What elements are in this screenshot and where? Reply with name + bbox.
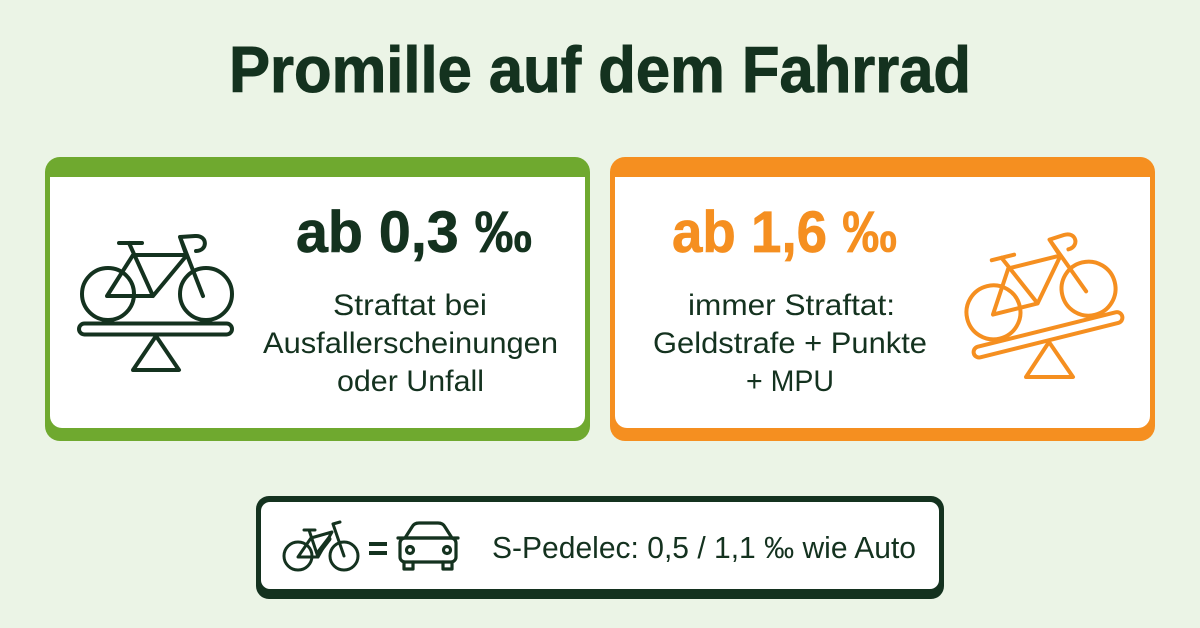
description (263, 289, 558, 398)
threshold heading: ab 0,3 ‰ (296, 200, 532, 265)
card body (615, 177, 1150, 428)
panel: S-Pedelec note (256, 496, 944, 599)
threshold heading: ab 1,6 ‰ (672, 200, 897, 265)
icon: bicycle on level scale (79, 236, 232, 370)
note body (261, 502, 939, 589)
description: Ausfallerscheinungen (263, 327, 558, 360)
card body (50, 177, 585, 428)
description: immer Straftat: (688, 289, 895, 322)
description: + MPU (746, 365, 834, 398)
icon: e-bike (284, 522, 358, 570)
icon: car (398, 523, 458, 569)
description: oder Unfall (337, 365, 484, 398)
description: Geldstrafe + Punkte (653, 327, 927, 360)
icon: bicycle on tilted scale (951, 226, 1125, 377)
card frame: orange (610, 157, 1155, 441)
panel: ab 1,6 promille (610, 157, 1155, 441)
icon: equals (369, 542, 387, 555)
title: Promille auf dem Fahrrad (229, 33, 971, 106)
note frame (256, 496, 944, 599)
panel: ab 0,3 promille (45, 157, 590, 441)
card frame: green (45, 157, 590, 441)
note text: S-Pedelec: 0,5 / 1,1 ‰ wie Auto (492, 531, 916, 565)
description (653, 289, 927, 398)
description: Straftat bei (333, 289, 487, 322)
